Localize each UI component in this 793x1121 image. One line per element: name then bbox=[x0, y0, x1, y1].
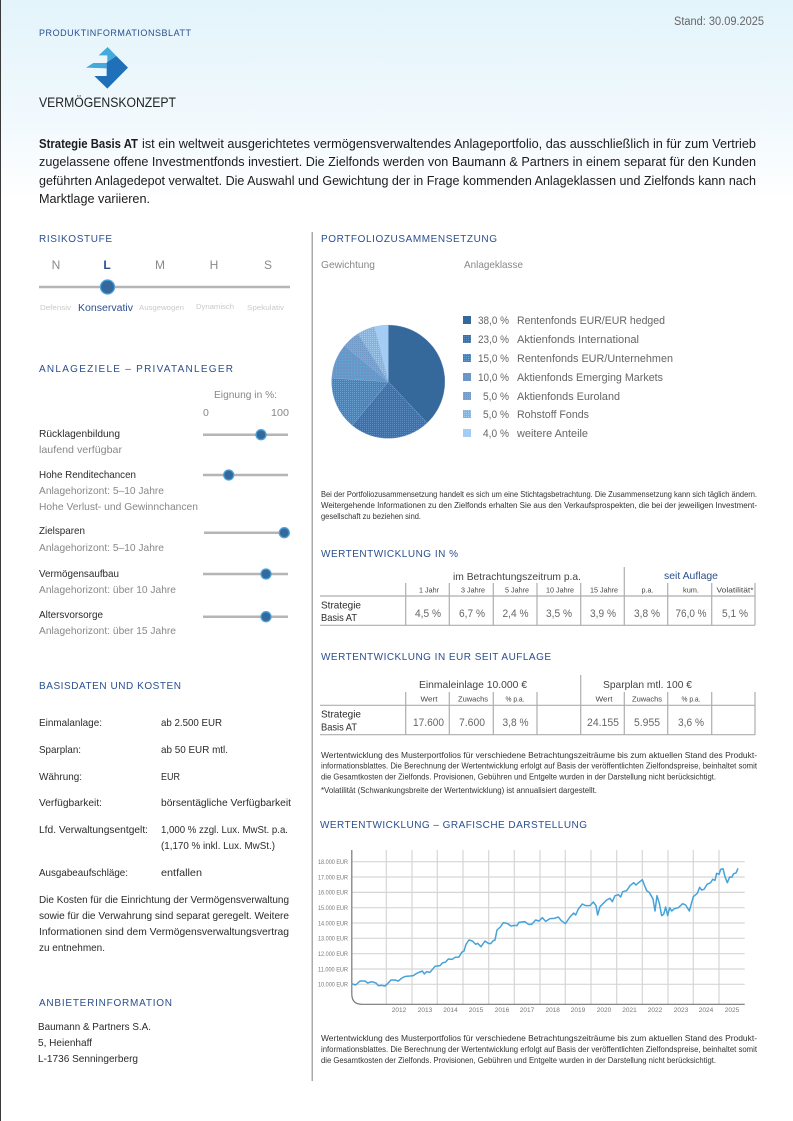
x axis labels bbox=[392, 1007, 740, 1014]
line chart bbox=[318, 850, 745, 1014]
address: 5, Heienhaff bbox=[38, 1037, 92, 1049]
table: performance percent: 6,7 % bbox=[459, 608, 485, 620]
heading: Wertentwicklung in %: WERTENTWICKLUNG IN % bbox=[321, 549, 458, 560]
data rows: börsentägliche Verfügbarkeit bbox=[161, 797, 291, 809]
panel: portfolio composition bbox=[321, 234, 757, 521]
table: performance percent: p.a. bbox=[642, 586, 654, 595]
risk labels: Defensiv bbox=[40, 303, 71, 312]
risk letters: M bbox=[155, 258, 165, 272]
pie legend: 10,0 % bbox=[478, 372, 509, 384]
performance note: Wertentwicklung des Musterportfolios für verschiedene Betrachtungszeiträume bis zum aktuellen Stand des Produkt- bbox=[321, 751, 757, 760]
goal: Hohe Renditechancen: Anlagehorizont: 5–10 Jahre bbox=[39, 485, 164, 497]
goal: Zielsparen: Anlagehorizont: 5–10 Jahre bbox=[39, 542, 164, 554]
table: performance EUR: 5.955 bbox=[634, 717, 660, 729]
chart note: informationsblattes. Die Berechnung der Wertentwicklung erfolgt auf Basis der veröffentlichten Zielfondspreise, beinhaltet somit bbox=[321, 1045, 758, 1054]
chart note: Wertentwicklung des Musterportfolios für verschiedene Betrachtungszeiträume bis zum aktuellen Stand des Produkt- bbox=[321, 1034, 757, 1043]
goal: Vermögensaufbau: Anlagehorizont: über 10 Jahre bbox=[39, 584, 176, 596]
heading: grafische Darstellung: WERTENTWICKLUNG – GRAFISCHE DARSTELLUNG bbox=[320, 820, 587, 831]
goal: Vermögensaufbau bbox=[39, 568, 288, 596]
data rows: EUR bbox=[161, 771, 180, 783]
panel: basic data and costs bbox=[39, 681, 291, 954]
data rows: Verfügbarkeit: bbox=[39, 797, 102, 809]
table: performance EUR: Strategie bbox=[321, 709, 361, 721]
suitability scale bbox=[203, 389, 289, 419]
data rows: Einmalanlage: bbox=[39, 717, 102, 729]
goal: Rücklagenbildung: laufend verfügbar bbox=[39, 444, 123, 456]
table: performance percent: 3 Jahre bbox=[461, 586, 485, 595]
address: L-1736 Senningerberg bbox=[38, 1053, 138, 1065]
risk labels: Dynamisch bbox=[196, 302, 234, 311]
performance note: die Gesamtkosten der Zielfonds. Provisionen, Gebühren und Entgelte wurden in der Darstellung nicht berücksichtigt. bbox=[321, 772, 716, 782]
y axis labels bbox=[318, 859, 348, 989]
risk labels: Spekulativ bbox=[247, 303, 284, 312]
performance note: informationsblattes. Die Berechnung der Wertentwicklung erfolgt auf Basis der veröffentlichten Zielfondspreise, beinhaltet somit bbox=[321, 762, 758, 770]
logo wordmark: VERMÖGENSKONZEPT bbox=[39, 95, 176, 110]
data rows: Lfd. Verwaltungsentgelt: bbox=[39, 824, 148, 836]
pie chart bbox=[332, 325, 445, 438]
table: performance percent: kum. bbox=[683, 586, 699, 595]
table: performance percent: seit Auflage bbox=[664, 570, 718, 582]
risk labels: Konservativ bbox=[78, 303, 133, 314]
pie legend bbox=[463, 315, 673, 440]
table: performance EUR: Wert bbox=[420, 695, 438, 704]
panel: performance in percent bbox=[320, 549, 755, 625]
pie legend: 38,0 % bbox=[478, 315, 509, 327]
portfolio note: Bei der Portfoliozusammensetzung handelt es sich um eine Stichtagsbetrachtung. Die Zusammensetzung kann sich täglich ändern. bbox=[321, 490, 757, 499]
table: performance EUR: 3,8 % bbox=[502, 717, 529, 729]
x axis labels: 2014 bbox=[443, 1007, 458, 1014]
table: performance percent: 3,9 % bbox=[590, 608, 616, 620]
y axis labels: 10.000 EUR bbox=[318, 982, 348, 989]
goal: Altersvorsorge: Anlagehorizont: über 15 Jahre bbox=[39, 625, 176, 637]
table: performance EUR: 17.600 bbox=[413, 717, 444, 729]
portfolio note: gesellschaft zu beziehen sind. bbox=[321, 512, 421, 521]
x axis labels: 2017 bbox=[520, 1007, 535, 1014]
table: performance EUR: % p.a. bbox=[682, 695, 700, 704]
y axis labels: 17.000 EUR bbox=[318, 874, 348, 881]
y axis labels: 15.000 EUR bbox=[318, 905, 348, 912]
table: performance percent: Strategie bbox=[321, 600, 361, 612]
table: performance EUR bbox=[320, 675, 755, 735]
portfolio note bbox=[321, 490, 757, 521]
data rows: ab 2.500 EUR bbox=[161, 717, 222, 729]
intro paragraph bbox=[39, 137, 756, 206]
table: performance EUR: Zuwachs bbox=[632, 695, 662, 704]
date stamp: Stand: 30.09.2025 bbox=[674, 16, 764, 28]
goal: Hohe Renditechancen bbox=[39, 469, 288, 513]
chart note bbox=[321, 1034, 758, 1065]
pie legend: 15,0 % bbox=[478, 353, 509, 365]
table: performance percent: 2,4 % bbox=[502, 608, 529, 620]
data rows: (1,170 % inkl. Lux. MwSt.) bbox=[161, 840, 275, 852]
pie legend: Rentenfonds EUR/Unternehmen bbox=[517, 353, 673, 365]
risk labels: Ausgewogen bbox=[139, 303, 184, 312]
pie legend: weitere Anteile bbox=[516, 428, 588, 440]
pie legend: Aktienfonds Euroland bbox=[517, 391, 620, 403]
goal: Hohe Renditechancen: Hohe Renditechancen bbox=[39, 469, 136, 481]
table: performance percent bbox=[320, 567, 755, 625]
icon: logo mark bbox=[86, 47, 128, 89]
suitability scale: Eignung in %: bbox=[214, 389, 277, 401]
table: performance EUR: 3,6 % bbox=[678, 717, 704, 729]
risk letters: S bbox=[264, 258, 272, 272]
x axis labels: 2025 bbox=[725, 1007, 740, 1014]
x axis labels: 2016 bbox=[495, 1007, 510, 1014]
cost note: Informationen sind dem Vermögensverwaltungsvertrag bbox=[39, 926, 289, 938]
risk labels bbox=[40, 302, 284, 314]
y axis labels: 16.000 EUR bbox=[318, 890, 348, 897]
goal: Vermögensaufbau: Vermögensaufbau bbox=[39, 568, 119, 580]
x axis labels: 2024 bbox=[699, 1007, 714, 1014]
table: performance percent: 1 Jahr bbox=[419, 586, 439, 595]
column labels bbox=[321, 259, 523, 271]
heading: Portfoliozusammensetzung: PORTFOLIOZUSAMMENSETZUNG bbox=[321, 234, 497, 245]
risk slider bbox=[39, 280, 290, 294]
logo bbox=[39, 47, 176, 110]
x axis labels: 2022 bbox=[648, 1007, 663, 1014]
intro paragraph: Marktlage variieren. bbox=[39, 192, 150, 206]
suitability scale: 100 bbox=[271, 407, 289, 419]
pie legend: Aktienfonds International bbox=[517, 334, 639, 346]
document label: PRODUKTINFORMATIONSBLATT bbox=[39, 28, 192, 38]
goal: Zielsparen bbox=[39, 525, 289, 554]
x axis labels: 2021 bbox=[622, 1007, 637, 1014]
intro paragraph: geführten Anlagedepot verwaltet. Die Auswahl und Gewichtung der in Frage kommenden Anlageklassen und Zielfonds kann nach bbox=[39, 174, 756, 188]
performance note bbox=[321, 751, 758, 795]
data rows bbox=[39, 717, 291, 879]
table: performance EUR: Sparplan mtl. 100 € bbox=[603, 679, 692, 691]
table: performance percent: 3,5 % bbox=[546, 608, 572, 620]
table: performance EUR: Einmaleinlage 10.000 € bbox=[419, 679, 527, 691]
heading: Anbieterinformation: ANBIETERINFORMATION bbox=[39, 998, 172, 1009]
data rows: Währung: bbox=[39, 771, 82, 783]
pie legend: Aktienfonds Emerging Markets bbox=[517, 372, 663, 384]
x axis labels: 2019 bbox=[571, 1007, 586, 1014]
column labels: Gewichtung bbox=[321, 259, 375, 271]
suitability scale: 0 bbox=[203, 407, 209, 419]
heading: Basisdaten: BASISDATEN UND KOSTEN bbox=[39, 681, 181, 692]
cost note: zu entnehmen. bbox=[39, 942, 105, 954]
table: performance EUR: 7.600 bbox=[459, 717, 485, 729]
pie legend: 5,0 % bbox=[483, 391, 509, 403]
data rows: ab 50 EUR mtl. bbox=[161, 744, 228, 756]
table: performance percent: 5,1 % bbox=[722, 608, 748, 620]
address bbox=[38, 1021, 151, 1065]
x axis labels: 2023 bbox=[674, 1007, 689, 1014]
y axis labels: 13.000 EUR bbox=[318, 936, 348, 943]
table: performance EUR: Wert bbox=[596, 695, 613, 704]
panel: performance chart bbox=[318, 820, 758, 1065]
x axis labels: 2012 bbox=[392, 1007, 407, 1014]
panel: investment goals bbox=[39, 364, 289, 637]
table: performance percent: Basis AT bbox=[321, 612, 358, 624]
goal: Altersvorsorge: Altersvorsorge bbox=[39, 609, 103, 621]
x axis labels: 2018 bbox=[545, 1007, 560, 1014]
table: performance EUR: Basis AT bbox=[321, 722, 358, 734]
table: performance percent: 15 Jahre bbox=[590, 586, 618, 595]
pie legend: Rentenfonds EUR/EUR hedged bbox=[517, 315, 665, 327]
table: performance percent: Volatilität* bbox=[716, 586, 754, 595]
table: performance EUR: 24.155 bbox=[587, 717, 619, 729]
heading: Anlageziele: ANLAGEZIELE – PRIVATANLEGER bbox=[39, 364, 233, 375]
table: performance EUR: % p.a. bbox=[506, 695, 524, 704]
pie legend: 23,0 % bbox=[478, 334, 509, 346]
pie legend: Rohstoff Fonds bbox=[517, 409, 589, 421]
heading: Risikostufe: RISIKOSTUFE bbox=[39, 234, 112, 245]
panel: risk level bbox=[39, 234, 290, 314]
table: performance percent: 10 Jahre bbox=[546, 586, 574, 595]
heading: Wertentwicklung in EUR: WERTENTWICKLUNG IN EUR SEIT AUFLAGE bbox=[321, 652, 551, 663]
x axis labels: 2015 bbox=[469, 1007, 484, 1014]
risk letters bbox=[52, 258, 272, 272]
cost note: sowie für die Verwahrung sind separat geregelt. Weitere bbox=[39, 910, 289, 922]
table: performance percent: 76,0 % bbox=[676, 608, 707, 620]
goal: Rücklagenbildung: Rücklagenbildung bbox=[39, 428, 120, 440]
cost note: Die Kosten für die Einrichtung der Vermögensverwaltung bbox=[39, 894, 289, 906]
data rows: Sparplan: bbox=[39, 744, 81, 756]
chart note: die Gesamtkosten der Zielfonds. Provisionen, Gebühren und Entgelte wurden in der Darstellung nicht berücksichtigt. bbox=[321, 1056, 716, 1065]
x axis labels: 2020 bbox=[597, 1007, 612, 1014]
intro paragraph: zugelassene offene Investmentfonds investiert. Die Zielfonds werden von Baumann & Partners in einem separat für den Kunden bbox=[39, 155, 756, 169]
column labels: Anlageklasse bbox=[464, 259, 523, 271]
goal: Rücklagenbildung bbox=[39, 428, 288, 456]
x axis labels: 2013 bbox=[418, 1007, 433, 1014]
table: performance percent: 5 Jahre bbox=[505, 586, 529, 595]
risk letters: L bbox=[103, 258, 111, 272]
panel: provider information bbox=[38, 998, 172, 1065]
table: performance percent: 4,5 % bbox=[415, 608, 441, 620]
pie legend: 4,0 % bbox=[483, 428, 509, 440]
intro paragraph: Strategie Basis AT bbox=[39, 137, 138, 151]
pie legend: 5,0 % bbox=[483, 409, 509, 421]
goal: Zielsparen: Zielsparen bbox=[39, 525, 85, 537]
y axis labels: 18.000 EUR bbox=[318, 859, 348, 866]
cost note bbox=[39, 894, 289, 954]
data rows: Ausgabeaufschläge: bbox=[39, 867, 128, 879]
table: performance percent: im Betrachtungszeitrum p.a. bbox=[453, 571, 581, 583]
data rows: 1,000 % zzgl. Lux. MwSt. p.a. bbox=[161, 824, 288, 836]
y axis labels: 11.000 EUR bbox=[318, 966, 348, 973]
y axis labels: 12.000 EUR bbox=[318, 951, 348, 958]
y axis labels: 14.000 EUR bbox=[318, 920, 348, 927]
column divider bbox=[312, 232, 313, 1081]
table: performance EUR: Zuwachs bbox=[458, 695, 488, 704]
intro paragraph: ist ein weltweit ausgerichtetes vermögensverwaltendes Anlageportfolio, das ausschließlich in für zum Vertrieb bbox=[142, 137, 756, 151]
goal: Altersvorsorge bbox=[39, 609, 288, 637]
portfolio note: Weitergehende Informationen zu den Zielfonds erhalten Sie aus den Verkaufsprospekten, die bei der jeweiligen Investment- bbox=[321, 501, 757, 510]
performance note: *Volatilität (Schwankungsbreite der Wertentwicklung) ist annualisiert dargestellt. bbox=[321, 786, 597, 795]
table: performance percent: 3,8 % bbox=[634, 608, 660, 620]
risk letters: N bbox=[52, 258, 60, 272]
goal: Hohe Renditechancen: Hohe Verlust- und Gewinnchancen bbox=[39, 501, 198, 513]
risk letters: H bbox=[210, 258, 218, 272]
address: Baumann & Partners S.A. bbox=[38, 1021, 151, 1033]
data rows: entfallen bbox=[161, 867, 202, 879]
panel: performance in EUR bbox=[320, 652, 758, 795]
